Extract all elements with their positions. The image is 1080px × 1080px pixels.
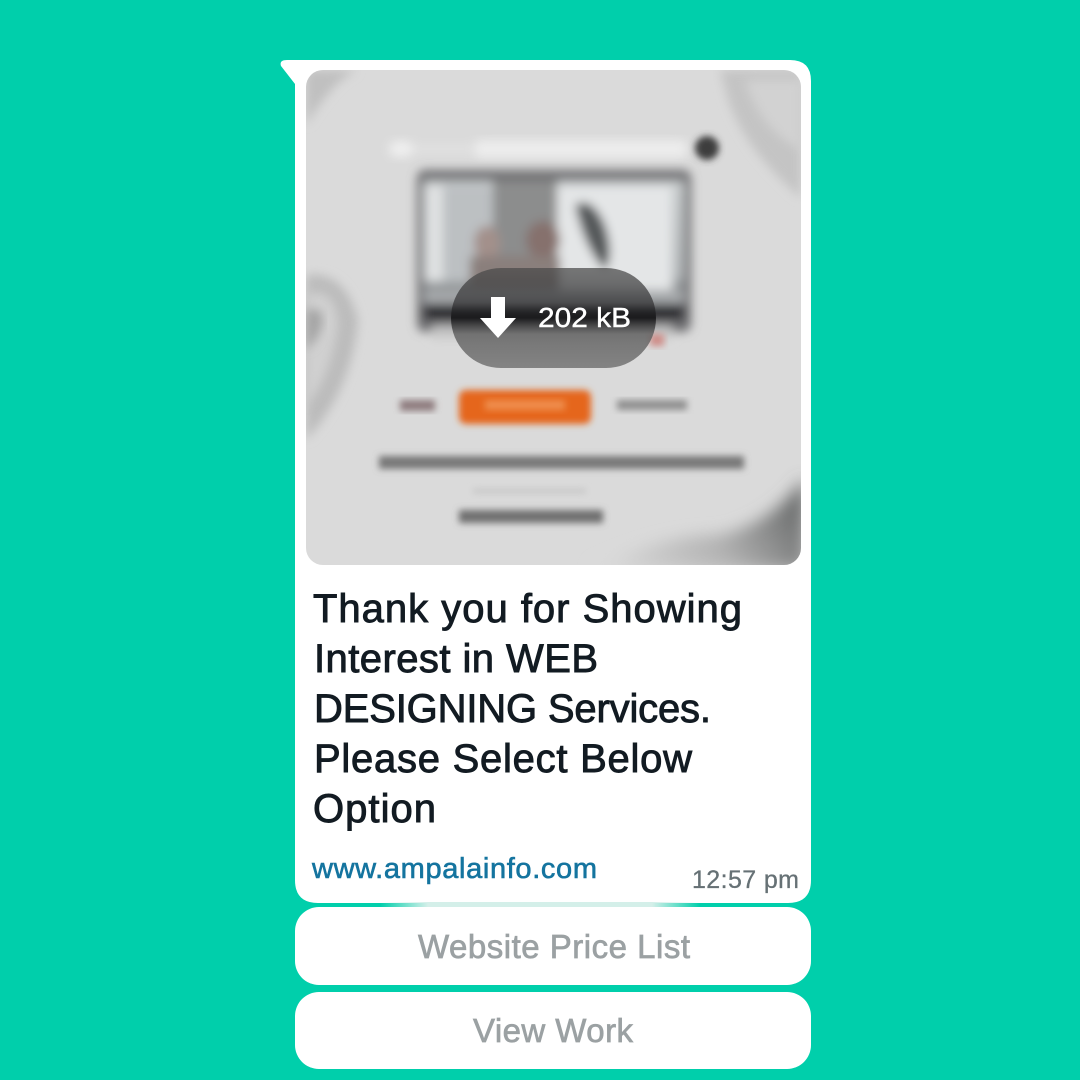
orange blurred button: [459, 390, 591, 424]
message text: Please Select Below: [314, 737, 692, 781]
blurred caption lines: [379, 456, 744, 523]
icon: download arrow: [480, 297, 516, 338]
file size: 202 kB: [538, 302, 631, 333]
button: website price list: [295, 907, 811, 985]
message text: [313, 587, 742, 831]
blurred button labels: [400, 400, 687, 411]
message text: Interest in WEB: [314, 637, 598, 681]
blurred image preview: [306, 70, 805, 570]
blurred red mark: [650, 334, 664, 346]
chat bubble: [281, 60, 811, 903]
button: website price list: Website Price List: [418, 928, 690, 965]
blurred monitor: [417, 170, 691, 338]
website link: www.ampalainfo.com: [311, 853, 597, 885]
timestamp: 12:57 pm: [692, 866, 799, 894]
download pill: [451, 268, 656, 368]
button: view work: [295, 992, 811, 1069]
button: view work: View Work: [473, 1012, 634, 1049]
message text: Thank you for Showing: [313, 587, 742, 631]
faint divider glow under bubble: [380, 902, 700, 907]
message text: DESIGNING Services.: [314, 687, 711, 731]
decorative corner shapes: [306, 70, 805, 570]
headline bar and dot: [389, 140, 687, 158]
message text: Option: [313, 787, 436, 831]
